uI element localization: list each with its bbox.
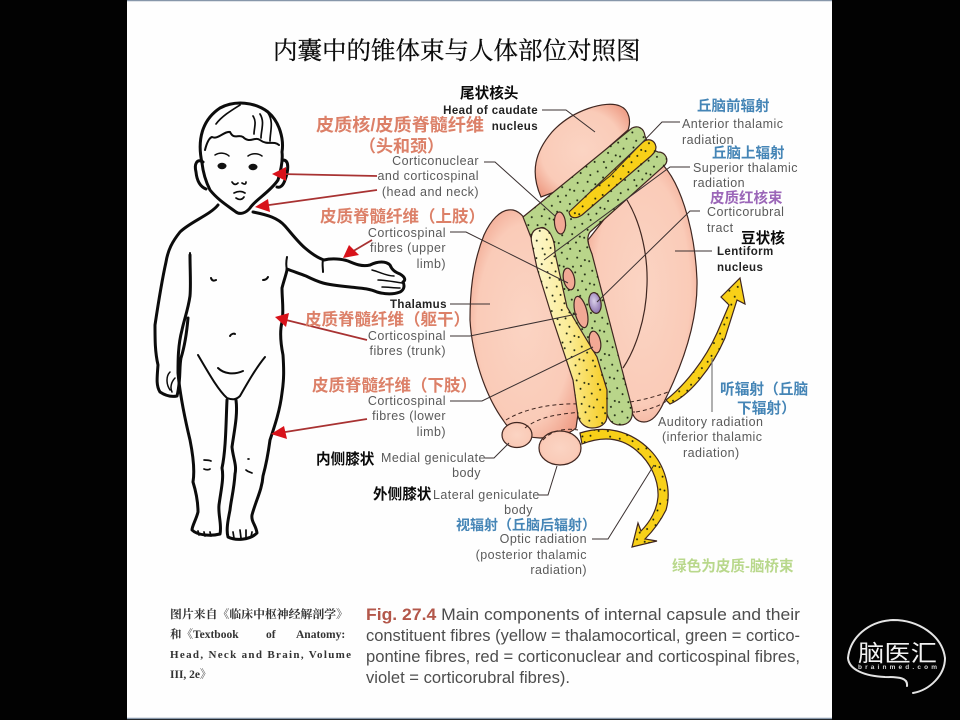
label: lateral geniculate [373, 485, 540, 517]
arrow: neck [255, 190, 377, 212]
label: upper limb: 皮质脊髓纤维（上肢） [320, 206, 485, 226]
label: medial geniculate: body [452, 466, 481, 480]
arrow: upper limb [343, 240, 372, 258]
label: corticonuclear: (head and neck) [382, 185, 479, 199]
label: auditory radiation [658, 380, 808, 460]
label: thalamus: Thalamus [390, 299, 447, 311]
source note: III, 2e》 [170, 668, 212, 681]
label: lentiform nucleus [717, 229, 785, 274]
right leg and side [227, 270, 287, 539]
label: lentiform nucleus: Lentiform [717, 246, 774, 258]
label: lower limb: limb) [417, 425, 446, 439]
label: corticorubral tract: Corticorubral [707, 205, 784, 219]
label: head of caudate: nucleus [492, 121, 538, 133]
label: auditory radiation: 听辐射（丘脑 [720, 380, 808, 398]
source note [170, 607, 351, 681]
fingers of left hand [167, 372, 175, 392]
label: auditory radiation: Auditory radiation [658, 415, 763, 429]
arrow: head [272, 167, 377, 181]
label: head of caudate [443, 84, 538, 133]
label: medial geniculate [316, 450, 486, 480]
leader lines [450, 110, 712, 539]
label: trunk: Corticospinal [368, 329, 446, 343]
source note: 和《Textbook [170, 627, 239, 641]
label: medial geniculate: 内侧膝状 [316, 450, 375, 468]
label: auditory radiation: (inferior thalamic [662, 430, 762, 444]
label: anterior thalamic radiation: radiation [682, 133, 734, 147]
violet corticorubral oval [587, 292, 603, 314]
label: lentiform nucleus: 豆状核 [741, 229, 785, 247]
source note: Head, Neck and Brain, Volume [170, 649, 351, 661]
label: anterior thalamic radiation: Anterior thalamic [682, 117, 783, 131]
label: lower limb: Corticospinal [368, 394, 446, 408]
label: lower limb: fibres (lower [372, 409, 446, 423]
label: lower limb [312, 375, 477, 439]
figure caption [366, 606, 801, 687]
label: lentiform nucleus: nucleus [717, 262, 763, 274]
label: upper limb [320, 206, 485, 271]
source note: Anatomy: [296, 629, 345, 641]
head and hair [195, 103, 288, 213]
label: green note: 绿色为皮质-脑桥束 [672, 557, 794, 575]
figure caption: pontine fibres, red = corticonuclear and corticospinal fibres, [366, 648, 800, 666]
label: corticorubral tract [707, 189, 784, 235]
label: superior thalamic radiation [693, 144, 798, 190]
title: 内囊中的锥体束与人体部位对照图 [273, 37, 640, 65]
label: optic radiation: radiation) [530, 563, 587, 577]
label: trunk: fibres (trunk) [370, 344, 446, 358]
label: corticonuclear: （头和颈） [359, 137, 444, 156]
label: upper limb: fibres (upper [370, 241, 446, 255]
optic radiation arrow [580, 429, 668, 547]
label: head of caudate: 尾状核头 [460, 84, 519, 102]
label: corticonuclear: and corticospinal [378, 169, 479, 183]
label: lateral geniculate: 外侧膝状 [373, 485, 432, 503]
labels [305, 84, 808, 577]
label: superior thalamic radiation: 丘脑上辐射 [712, 144, 784, 162]
child figure [155, 103, 405, 539]
lentiform nucleus [588, 158, 697, 422]
head of caudate [535, 104, 629, 197]
label: corticonuclear: 皮质核/皮质脊髓纤维 [316, 115, 484, 135]
label: upper limb: Corticospinal [368, 226, 446, 240]
figure caption: violet = corticorubral fibres). [366, 669, 570, 687]
label: superior thalamic radiation: radiation [693, 176, 745, 190]
crotch and belly details [198, 277, 268, 399]
label: lateral geniculate: body [504, 503, 533, 517]
red arrows to body parts [255, 167, 377, 439]
label: head of caudate: Head of caudate [443, 105, 538, 117]
watermark logo: 脑医汇 [858, 640, 937, 666]
label: auditory radiation: 下辐射） [737, 399, 796, 417]
label: anterior thalamic radiation: 丘脑前辐射 [697, 97, 770, 115]
source note: 图片来自《临床中枢神经解剖学》 [170, 607, 348, 621]
torso and left side [155, 205, 227, 535]
knees and toes [198, 459, 252, 538]
yellow thalamocortical fibres [531, 228, 607, 428]
white page panel [127, 0, 832, 719]
internal capsule diagram [470, 104, 745, 547]
green corticopontine fibres [523, 127, 667, 425]
label: anterior thalamic radiation [682, 97, 783, 147]
label: lower limb: 皮质脊髓纤维（下肢） [312, 375, 477, 395]
thalamus [470, 210, 580, 438]
label: optic radiation [456, 517, 596, 577]
label: corticorubral tract: 皮质红核束 [710, 189, 783, 207]
auditory radiation arrow [666, 278, 745, 404]
figure caption: constituent fibres (yellow = thalamocortical, green = cortico- [366, 627, 800, 645]
watermark logo: brainmed.com [858, 664, 937, 671]
label: lateral geniculate: Lateral geniculate [433, 488, 540, 502]
label: trunk [305, 309, 470, 358]
label: corticonuclear [316, 115, 484, 199]
lateral geniculate body [539, 431, 581, 465]
arrow: lower limb [271, 419, 367, 439]
label: trunk: 皮质脊髓纤维（躯干） [305, 309, 470, 329]
red fibre ovals [554, 212, 603, 354]
label: medial geniculate: Medial geniculate [381, 451, 486, 465]
label: auditory radiation: radiation) [683, 446, 740, 460]
label: corticonuclear: Corticonuclear [392, 154, 479, 168]
watermark logo [848, 620, 945, 693]
source note: of [266, 629, 276, 641]
label: upper limb: limb) [417, 257, 446, 271]
label: optic radiation: 视辐射（丘脑后辐射） [456, 517, 596, 533]
right arm and hand [190, 212, 405, 294]
yellow anterior thalamic radiation strip [569, 140, 656, 218]
label: optic radiation: (posterior thalamic [476, 548, 587, 562]
label: superior thalamic radiation: Superior thalamic [693, 161, 798, 175]
arrow: trunk [275, 313, 367, 340]
label: optic radiation: Optic radiation [500, 532, 587, 546]
label: corticorubral tract: tract [707, 221, 734, 235]
putamen inner arc [623, 200, 647, 368]
dashed boundaries of geniculate region [506, 392, 668, 440]
figure caption: Fig. 27.4 Main components of internal capsule and their [366, 606, 801, 624]
medial geniculate body [502, 422, 532, 448]
face [215, 153, 262, 199]
